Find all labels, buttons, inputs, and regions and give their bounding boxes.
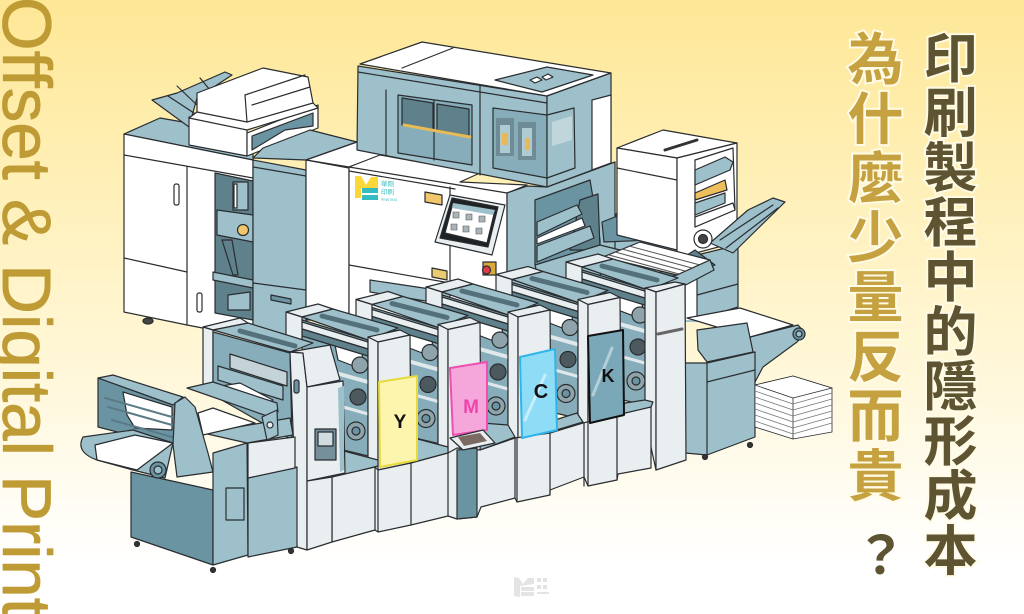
label Y: Y: [394, 412, 407, 433]
right delivery conveyor: [687, 308, 805, 382]
press station 5: [566, 254, 678, 406]
paper stack: [755, 376, 832, 439]
press station 4: K: [496, 266, 608, 418]
first press control pillar: [290, 345, 345, 550]
right printer unit lower body: [697, 245, 738, 320]
right teal frame with rollers: [507, 162, 620, 300]
control panel: [450, 430, 495, 450]
press station 3: C: [426, 279, 538, 431]
first press unit: [203, 318, 313, 440]
control stand: [457, 448, 477, 519]
first press infeed and paper: [187, 382, 293, 443]
top module: [357, 42, 611, 187]
white column: [306, 142, 382, 320]
emergency stop button: [482, 262, 496, 275]
press station 1: Y: [286, 304, 398, 456]
left feeder paper trays: [152, 72, 232, 127]
sheet: M: [450, 362, 487, 435]
left feeder printer unit: [124, 118, 253, 335]
teal column: [253, 130, 357, 340]
left delivery lower cabinet: [131, 437, 297, 572]
rear teal fill behind stations: [612, 240, 697, 322]
left delivery frame and belt: [81, 375, 213, 478]
sheet: Y: [379, 376, 417, 467]
logo: 印刷: [381, 188, 394, 196]
touchscreen panel: [435, 195, 505, 255]
label K: K: [602, 366, 614, 386]
pillar K: [578, 292, 621, 432]
right printer unit: [617, 130, 737, 258]
roller conveyor: [603, 242, 715, 288]
motor housing: [602, 202, 652, 242]
pillar Y: [368, 330, 411, 470]
bottom logo watermark: [514, 577, 549, 597]
logo: [355, 176, 398, 202]
label M: M: [463, 397, 479, 418]
press decks: [335, 400, 653, 476]
label C: C: [534, 381, 548, 403]
lower cabinets: [332, 407, 651, 542]
press station 2: M: [356, 292, 468, 444]
title: main heading: 印刷製程中的隱形成本: [915, 30, 975, 577]
right delivery cabinet: [685, 323, 755, 460]
main white body: [349, 155, 527, 330]
left feeder top cover: [189, 68, 318, 156]
sheet: K: [588, 330, 624, 423]
sheet: C: [520, 349, 557, 438]
end pillar: [645, 282, 686, 470]
logo: PRINTING: [381, 198, 398, 202]
title: question mark: ？: [846, 528, 904, 580]
logo text: 華剛: [381, 179, 394, 188]
right paper tray: [694, 198, 785, 253]
pillar C: [508, 305, 551, 445]
pillar M: [438, 318, 481, 458]
title: sub heading: 為什麼少量反而貴: [840, 30, 903, 506]
